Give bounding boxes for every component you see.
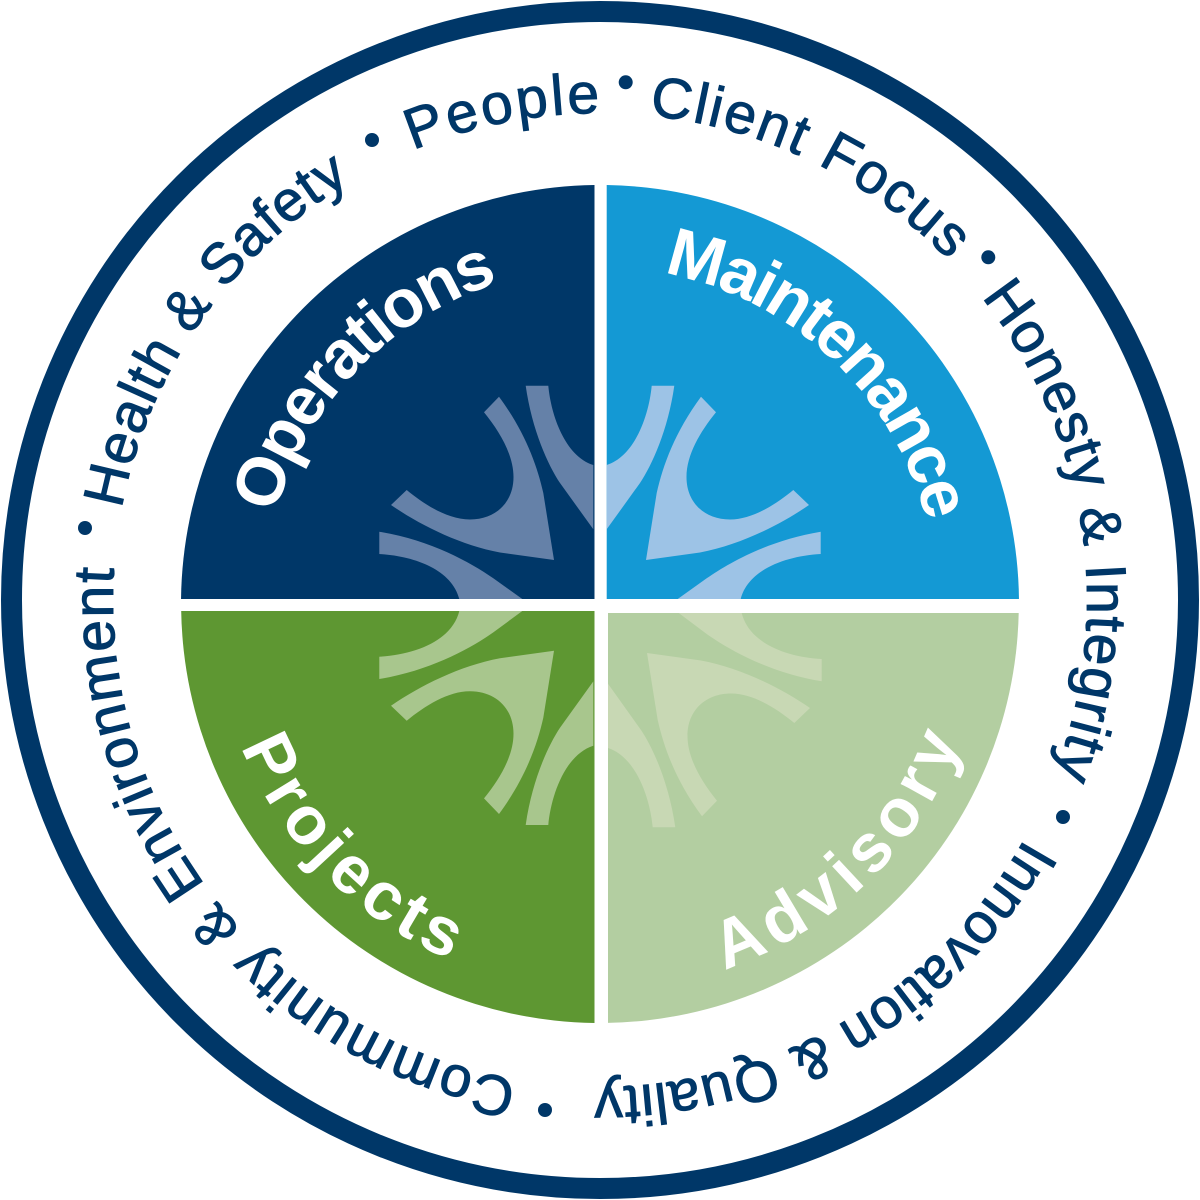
motif: Operations <box>379 386 593 599</box>
value: Innovation and Quality: Innovation & Quality <box>594 842 1057 1127</box>
quadrant: Operations <box>181 185 594 599</box>
label: Projects: Projects <box>242 730 458 956</box>
motif: Advisory <box>608 613 822 827</box>
quadrant: Maintenance <box>606 185 1019 599</box>
label: Advisory: Advisory <box>724 728 964 970</box>
quadrant: Advisory <box>608 613 1019 1023</box>
value: Community and Environment: Community & Environment <box>76 567 512 1116</box>
bullet separators <box>78 75 1070 1117</box>
motif: Projects <box>379 611 593 825</box>
motif: Maintenance <box>607 386 821 599</box>
value: Health and Safety: Health & Safety <box>83 156 342 505</box>
value: Honesty and Integrity: Honesty & Integrity <box>984 276 1126 786</box>
quadrant: Projects <box>181 611 594 1023</box>
value: Client Focus: Client Focus <box>654 78 966 256</box>
value: People: People <box>403 72 598 149</box>
label: Maintenance: Maintenance <box>668 228 958 517</box>
label: Operations: Operations <box>236 252 493 506</box>
